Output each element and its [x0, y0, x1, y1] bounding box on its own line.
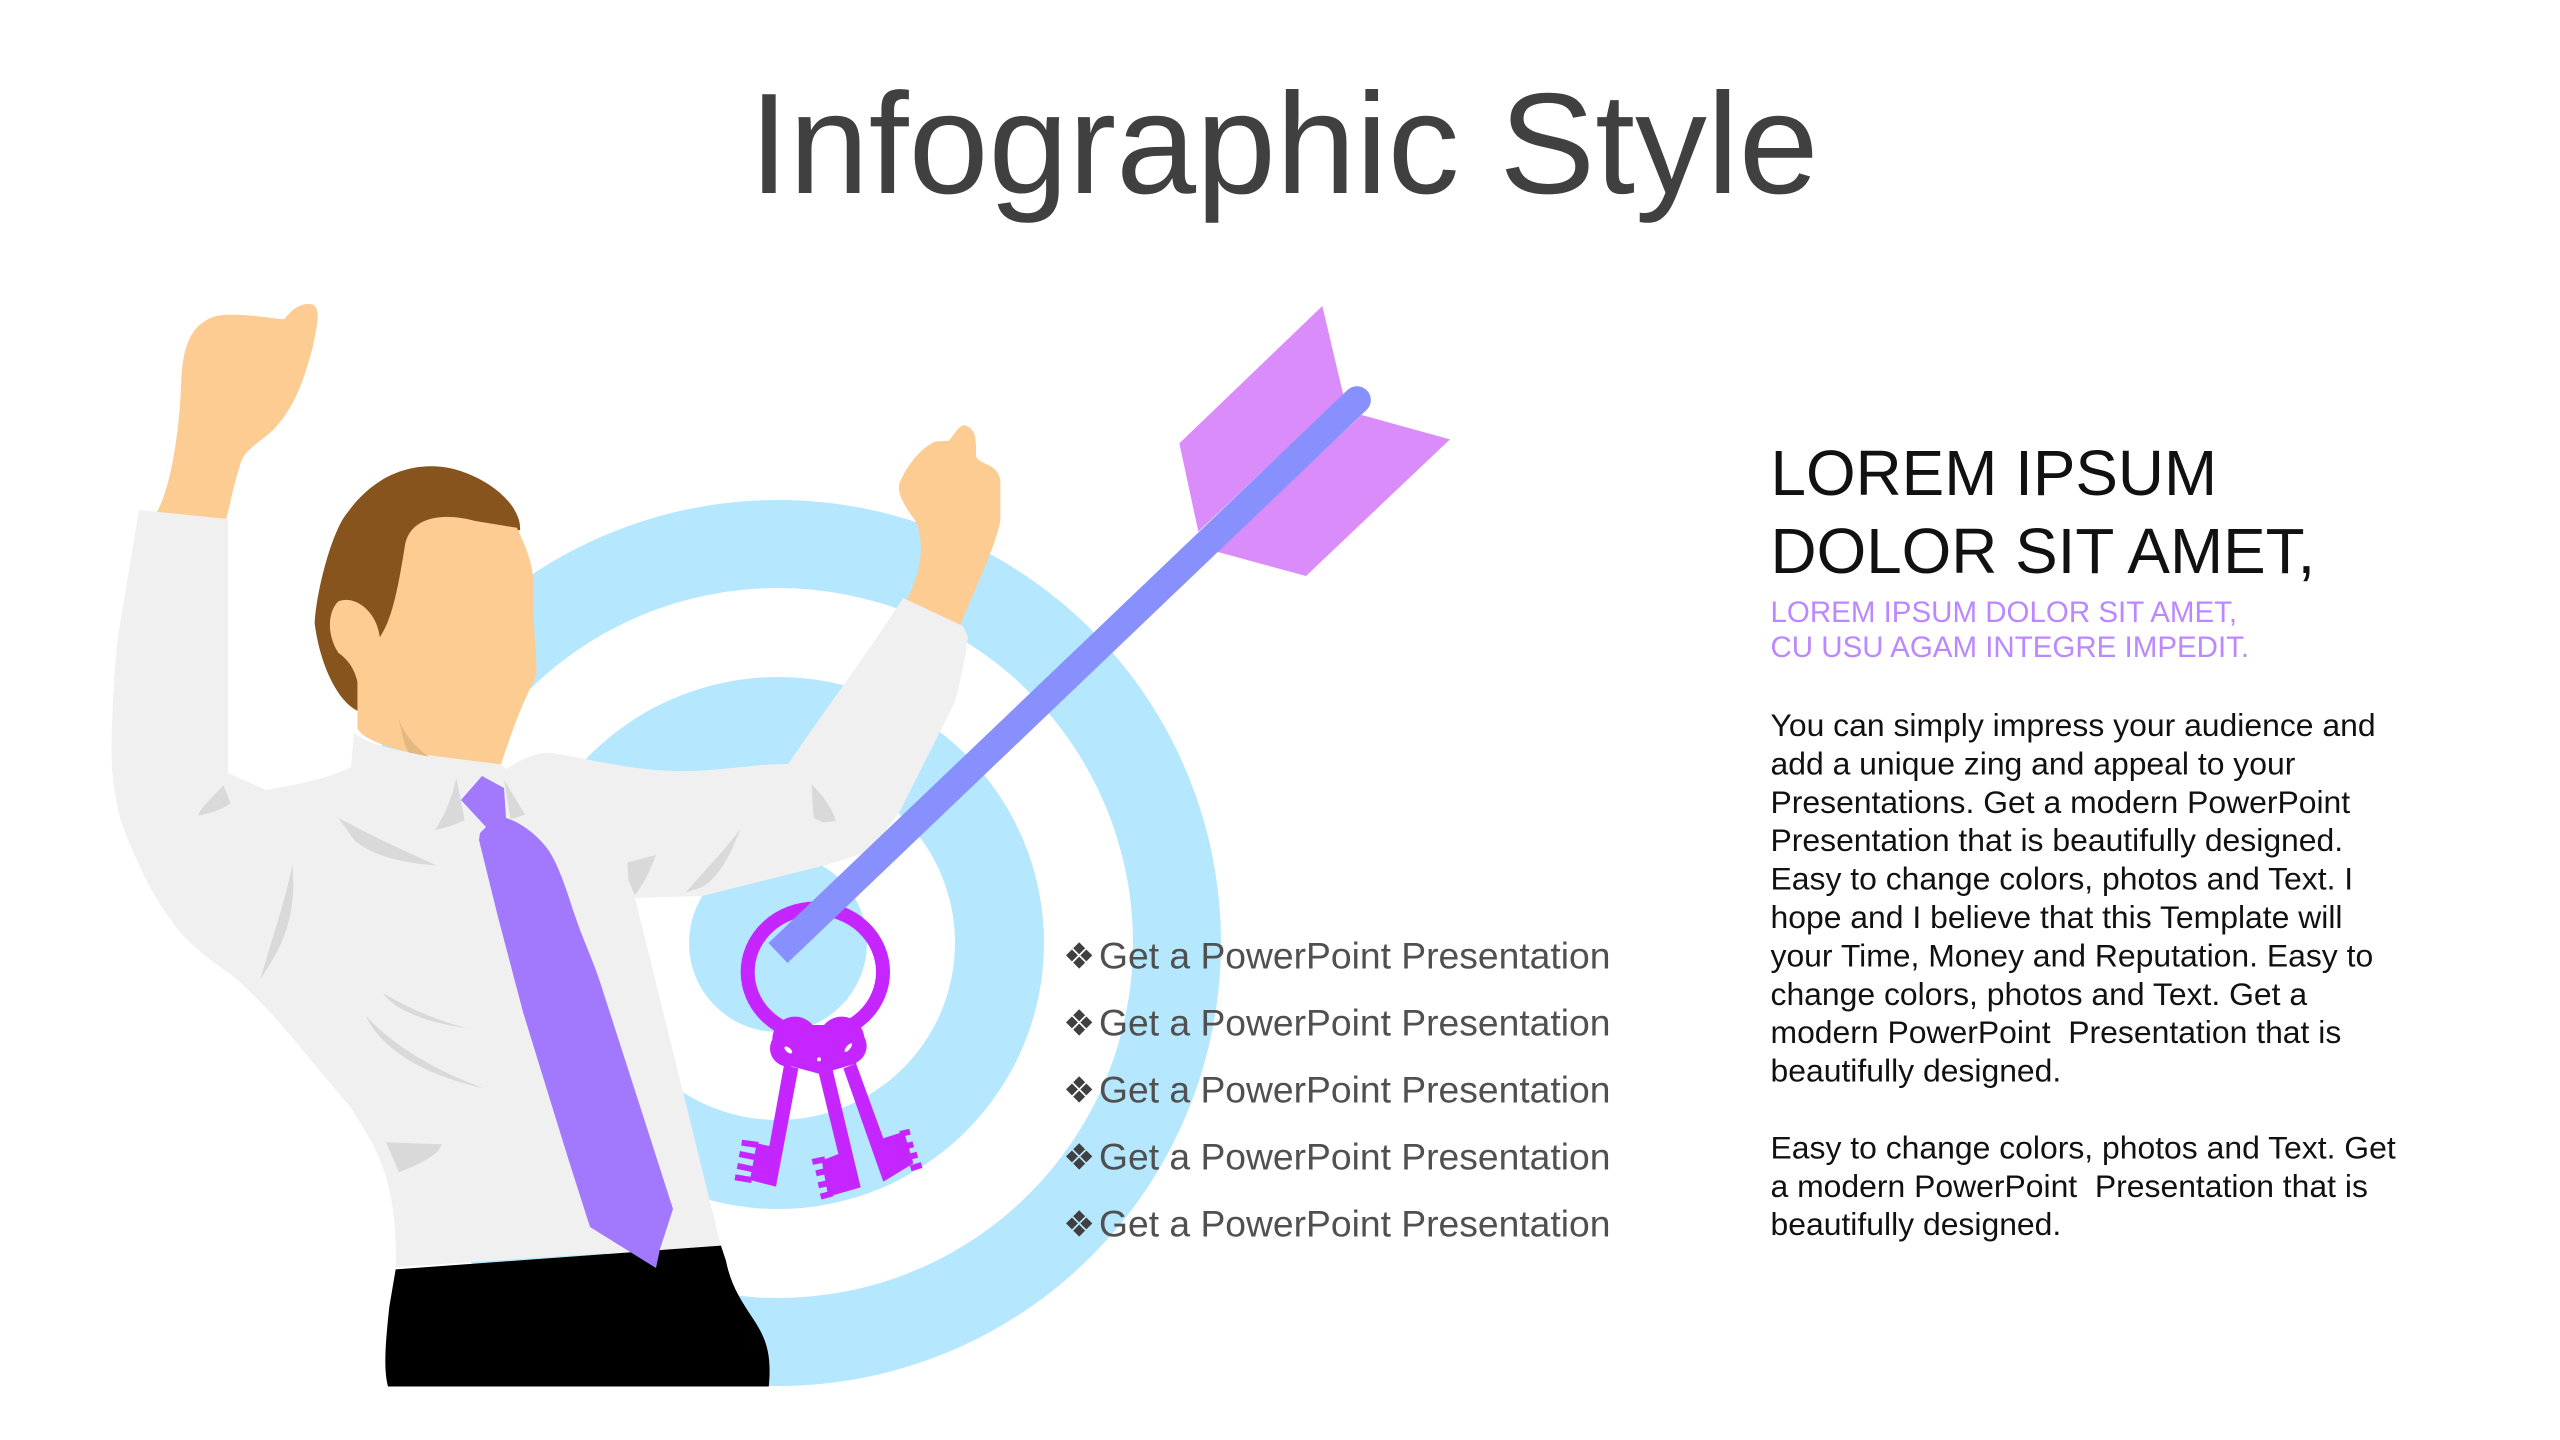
bullet 4: ❖ — [1063, 1138, 1095, 1178]
body paragraph 1: modern PowerPoint Presentation that is — [1770, 1014, 2341, 1050]
right column subheading: LOREM IPSUM DOLOR SIT AMET, — [1770, 596, 2237, 629]
body paragraph 1: your Time, Money and Reputation. Easy to — [1770, 937, 2373, 973]
body paragraph 1: You can simply impress your audience and — [1770, 707, 2376, 743]
body paragraph 2: beautifully designed. — [1770, 1206, 2061, 1242]
body paragraph 1: Presentation that is beautifully designed. — [1770, 822, 2343, 858]
bullet 1: Get a PowerPoint Presentation — [1099, 934, 1610, 976]
shirt fold shadows — [198, 778, 836, 1172]
body paragraph 1: Presentations. Get a modern PowerPoint — [1770, 784, 2350, 820]
icon: keys on a ring — [735, 909, 922, 1197]
bullet 2: Get a PowerPoint Presentation — [1099, 1002, 1610, 1044]
bullet list — [1063, 934, 1610, 1246]
white shirt — [111, 510, 968, 1267]
face and neck — [330, 517, 536, 764]
bullet 2: ❖ — [1063, 1004, 1095, 1044]
bullet 1: ❖ — [1063, 936, 1095, 978]
body paragraph 1: hope and I believe that this Template will — [1770, 899, 2343, 935]
hair — [315, 466, 520, 711]
purple tie — [461, 776, 673, 1268]
body paragraph 2: a modern PowerPoint Presentation that is — [1770, 1168, 2368, 1204]
bullet 3: ❖ — [1063, 1070, 1095, 1112]
right column heading: LOREM IPSUM — [1770, 437, 2217, 509]
bullet 3: Get a PowerPoint Presentation — [1099, 1068, 1610, 1110]
bullet 5: ❖ — [1063, 1204, 1095, 1246]
target rings — [335, 500, 1221, 1386]
body paragraph 1: add a unique zing and appeal to your — [1770, 745, 2296, 781]
neck shadow — [399, 720, 429, 757]
arrow — [778, 306, 1450, 953]
arrow fletching — [1179, 306, 1450, 576]
body paragraph 1: Easy to change colors, photos and Text. I — [1770, 861, 2353, 897]
right column subheading: CU USU AGAM INTEGRE IMPEDIT. — [1770, 631, 2249, 664]
black trousers — [385, 1246, 770, 1386]
person — [111, 304, 1000, 1386]
raised right hand — [899, 425, 1000, 626]
bullet 4: Get a PowerPoint Presentation — [1099, 1136, 1610, 1178]
title: Infographic Style — [749, 64, 1819, 224]
raised left hand — [155, 304, 318, 521]
body paragraph 1: change colors, photos and Text. Get a — [1770, 976, 2307, 1012]
arrow shaft — [778, 393, 1364, 953]
body paragraph 1: beautifully designed. — [1770, 1053, 2061, 1089]
right column heading: DOLOR SIT AMET, — [1770, 515, 2315, 587]
bullet 5: Get a PowerPoint Presentation — [1099, 1202, 1610, 1244]
body paragraph 2: Easy to change colors, photos and Text. Get — [1770, 1129, 2396, 1165]
